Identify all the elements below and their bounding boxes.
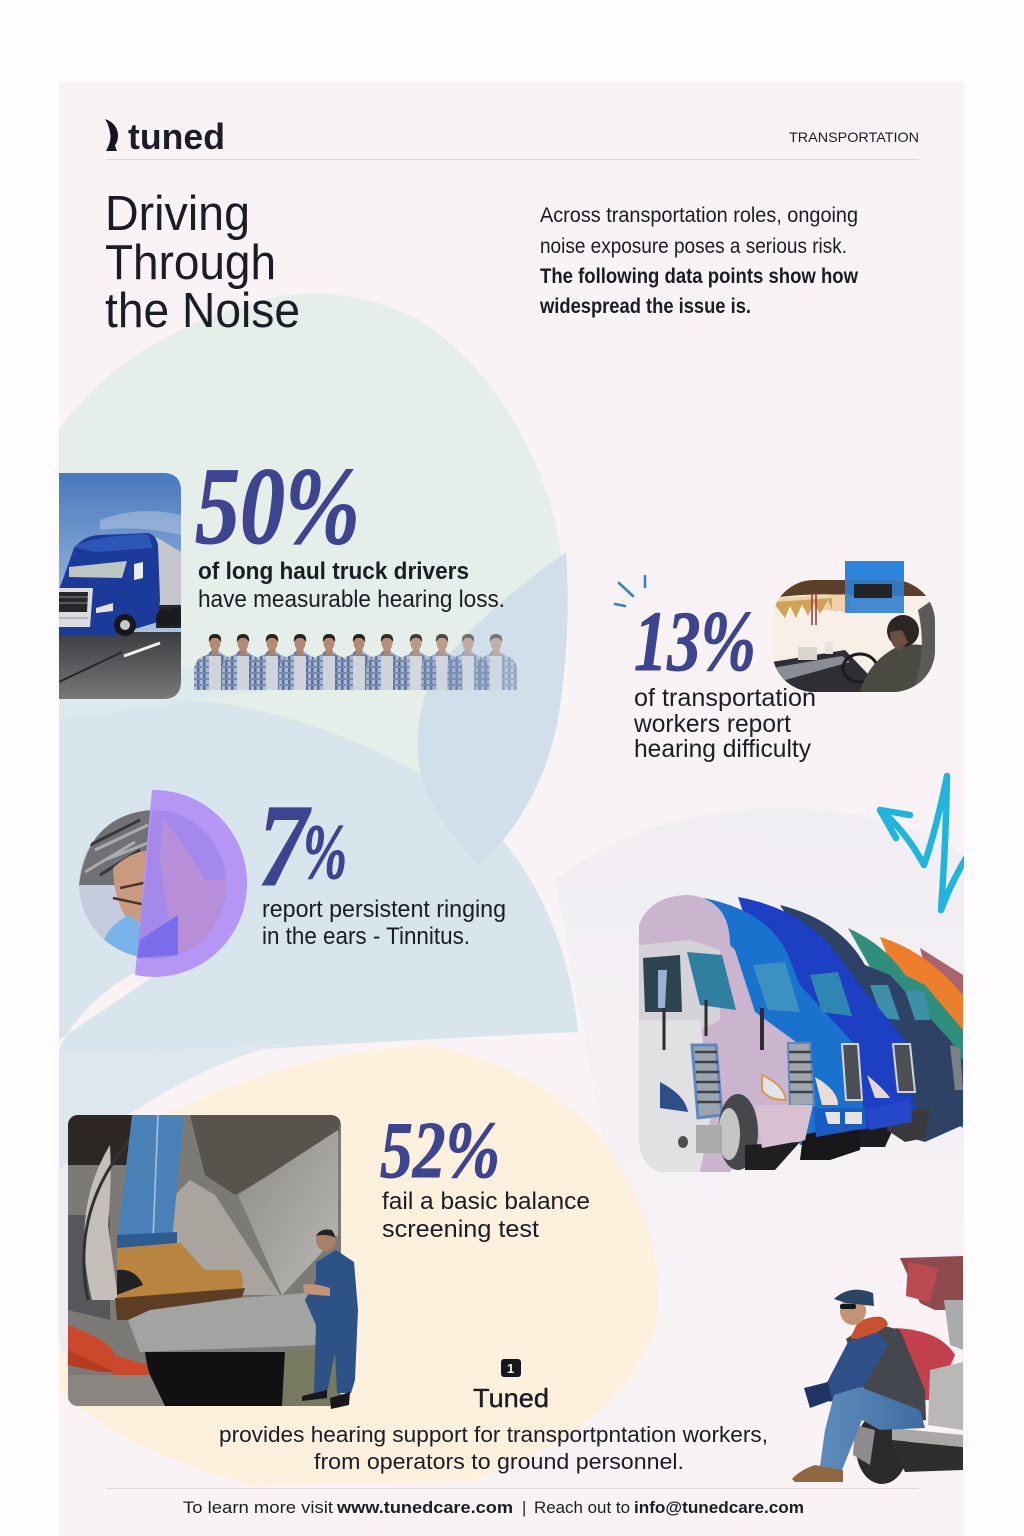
section label: TRANSPORTATION <box>789 129 919 145</box>
photo: truck on highway <box>59 473 185 699</box>
footer <box>183 1499 804 1517</box>
title: the Noise <box>105 284 300 338</box>
stat: 50%: have measurable hearing loss. <box>198 586 505 613</box>
stat: 7%: % <box>303 808 347 895</box>
title: Through <box>105 236 276 290</box>
stat: 13%: hearing difficulty <box>634 735 811 763</box>
stat: 13%: of transportation <box>634 684 816 712</box>
accent: tick marks <box>615 576 645 606</box>
footer: www.tunedcare.com <box>336 1499 513 1517</box>
icon row: people <box>194 634 517 690</box>
title <box>105 187 300 338</box>
photo: cab interior with driver <box>772 561 935 692</box>
stat: 52%: screening test <box>382 1216 539 1243</box>
stat: 50%: of long haul truck drivers <box>198 558 469 585</box>
title: Driving <box>105 187 250 241</box>
intro text: widespread the issue is. <box>539 295 751 318</box>
intro text: Across transportation roles, ongoing <box>540 204 858 227</box>
stat: 52%: fail a basic balance <box>382 1188 590 1215</box>
closing text: provides hearing support for transportpntation workers, <box>219 1422 768 1447</box>
intro text <box>539 204 859 318</box>
footer: info@tunedcare.com <box>634 1499 804 1517</box>
closing text <box>219 1383 768 1474</box>
figure: mechanic with clipboard <box>302 1229 358 1409</box>
photo: man covering ear with half ring <box>79 790 247 977</box>
stat: 7%: report persistent ringing <box>262 896 506 923</box>
footer: To learn more visit <box>183 1499 333 1517</box>
stat: 13%: 13% <box>634 593 756 689</box>
stat: 7%: 7 <box>258 780 311 911</box>
stat: 52% <box>380 1107 590 1243</box>
stat: 7%: in the ears - Tinnitus. <box>262 923 470 950</box>
accent: cyan squiggle arrow <box>880 776 966 910</box>
closing text: from operators to ground personnel. <box>314 1449 684 1474</box>
icon: tuned badge: 1 <box>507 1361 514 1376</box>
footer: Reach out to <box>534 1499 630 1517</box>
intro text: noise exposure poses a serious risk. <box>540 235 847 258</box>
stat: 13% <box>633 593 816 763</box>
decorative background blobs <box>59 293 964 1485</box>
closing text: Tuned <box>473 1383 549 1413</box>
icon: tuned badge <box>501 1359 521 1377</box>
footer: | <box>522 1499 526 1517</box>
photo: row of trucks <box>639 895 963 1172</box>
stat: 50%: 50% <box>195 445 360 567</box>
stat: 13%: workers report <box>633 710 791 738</box>
intro text: The following data points show how <box>540 265 859 288</box>
figure: driver seated on truck <box>792 1256 963 1484</box>
stat: 52%: 52% <box>380 1107 500 1195</box>
stat: 7% <box>258 780 506 950</box>
header <box>105 116 919 157</box>
logo: tuned <box>128 116 225 157</box>
photo: boot on truck step <box>68 1115 341 1406</box>
stat: 50% <box>195 445 505 613</box>
